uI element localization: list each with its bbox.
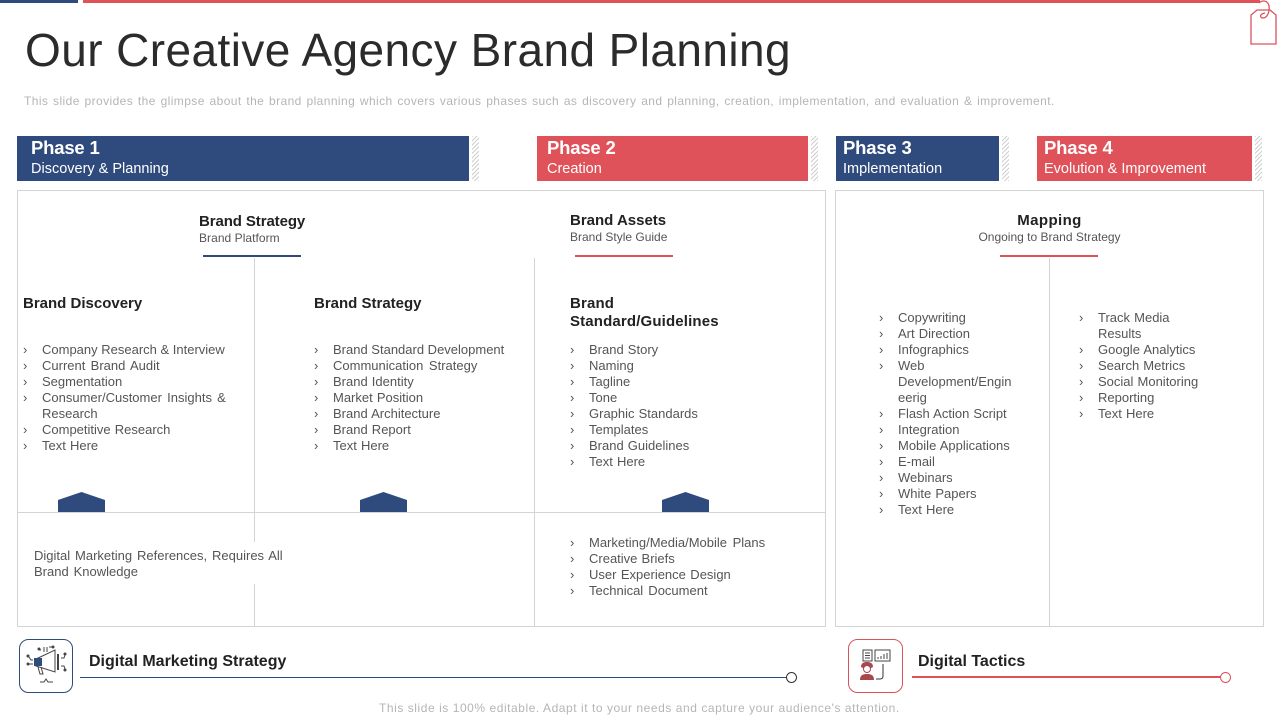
list: brand standard: Tone: [589, 390, 617, 405]
footer note: This slide is 100% editable. Adapt it to your needs and capture your audience's attention.: [379, 701, 900, 715]
list: brand discovery: Research: [42, 406, 98, 421]
list: implementation: Copywriting: [898, 310, 966, 325]
list: brand strategy: Brand Identity: [333, 374, 414, 389]
list: implementation: Flash Action Script: [898, 406, 1007, 421]
panel: implementation and evolution: [835, 190, 1264, 627]
list: brand discovery: Consumer/Customer Insights &: [42, 390, 226, 405]
list: marketing plans: Creative Briefs: [589, 551, 675, 566]
list: brand discovery: Current Brand Audit: [42, 358, 160, 373]
list: brand strategy: Text Here: [333, 438, 389, 453]
phase 4 header: Phase 4: [1044, 137, 1113, 158]
heading: brand discovery: Brand Discovery: [23, 295, 142, 312]
list: brand standard: Text Here: [589, 454, 645, 469]
heading: brand assets: [570, 212, 667, 244]
list: implementation: E-mail: [898, 454, 935, 469]
connector: digital marketing: [80, 672, 797, 683]
heading: brand strategy platform: Brand Strategy: [199, 213, 305, 230]
phase 2 header: Creation: [547, 161, 602, 177]
list: brand strategy: Brand Architecture: [333, 406, 440, 421]
list: brand discovery: [24, 342, 226, 453]
text block: digital marketing references: Digital Marketing References, Requires All: [34, 548, 283, 563]
list: marketing plans: User Experience Design: [589, 567, 731, 582]
list: brand strategy: Brand Standard Development: [333, 342, 504, 357]
heading: brand assets: Brand Assets: [570, 212, 666, 229]
list: marketing plans: Marketing/Media/Mobile Plans: [589, 535, 765, 550]
list: brand standard: Tagline: [589, 374, 630, 389]
list: brand discovery: Text Here: [42, 438, 98, 453]
list: brand standard: Templates: [589, 422, 648, 437]
list: implementation: Integration: [898, 422, 959, 437]
heading: brand standard guidelines: Standard/Guidelines: [570, 313, 719, 330]
list: brand strategy: Brand Report: [333, 422, 411, 437]
list: implementation: [880, 310, 1011, 517]
top accent bar: [0, 0, 1260, 3]
list: implementation: White Papers: [898, 486, 977, 501]
list: brand discovery: Competitive Research: [42, 422, 170, 437]
phase 1 header: [17, 136, 469, 181]
list: evaluation: Text Here: [1098, 406, 1154, 421]
heading: brand standard guidelines: [570, 295, 719, 330]
list: brand strategy: Market Position: [333, 390, 423, 405]
heading: mapping: Mapping: [1017, 212, 1082, 229]
list: brand discovery: Company Research & Interview: [42, 342, 225, 357]
list: implementation: Webinars: [898, 470, 953, 485]
marker: column 3: [662, 492, 709, 512]
phase 1 header: Discovery & Planning: [31, 161, 169, 177]
text block: digital marketing references: Brand Knowledge: [34, 564, 138, 579]
list: brand strategy: Communication Strategy: [333, 358, 477, 373]
heading: brand standard guidelines: Brand: [570, 295, 614, 312]
list: implementation: eerig: [898, 390, 927, 405]
phase 3 header: Phase 3: [843, 137, 912, 158]
list: brand standard: [570, 342, 698, 469]
list: evaluation: Track Media: [1098, 310, 1170, 325]
subtitle: This slide provides the glimpse about the brand planning which covers various phases such as discovery and planning, creation, implementation, and evaluation & improvement.: [24, 94, 1055, 108]
list: marketing plans: Technical Document: [589, 583, 708, 598]
list: implementation: Web: [898, 358, 924, 373]
list: evaluation: Search Metrics: [1098, 358, 1185, 373]
list: implementation: Text Here: [898, 502, 954, 517]
heading: mapping: Ongoing to Brand Strategy: [978, 230, 1121, 244]
list: evaluation: [1080, 310, 1198, 421]
icon: price tag: [1250, 0, 1277, 45]
heading: digital marketing strategy: Digital Marketing Strategy: [89, 653, 286, 670]
heading: brand strategy platform: [199, 213, 306, 245]
list: brand discovery: Segmentation: [42, 374, 122, 389]
list: implementation: Art Direction: [898, 326, 970, 341]
list: marketing plans: [570, 535, 765, 598]
heading: brand strategy: Brand Strategy: [314, 295, 422, 312]
list: evaluation: Reporting: [1098, 390, 1154, 405]
phase 3 header: Implementation: [843, 161, 942, 177]
list: implementation: Mobile Applications: [898, 438, 1010, 453]
list: brand strategy: [314, 342, 504, 453]
icon: megaphone: [19, 639, 73, 693]
phase 2 header: [537, 136, 808, 181]
list: brand standard: Graphic Standards: [589, 406, 698, 421]
title: Our Creative Agency Brand Planning: [25, 24, 791, 76]
connector: digital tactics: [912, 672, 1231, 683]
list: evaluation: Results: [1098, 326, 1141, 341]
icon: digital tactics: [848, 639, 903, 693]
marker: column 1: [58, 492, 105, 512]
phase 1 header: Phase 1: [31, 137, 100, 158]
phase 4 header: Evolution & Improvement: [1044, 161, 1206, 177]
list: evaluation: Social Monitoring: [1098, 374, 1198, 389]
marker: column 2: [360, 492, 407, 512]
list: evaluation: Google Analytics: [1098, 342, 1195, 357]
heading: mapping: [978, 212, 1121, 244]
phase 3 header: [836, 136, 999, 181]
list: implementation: Infographics: [898, 342, 969, 357]
heading: brand assets: Brand Style Guide: [570, 230, 667, 244]
heading: digital tactics: Digital Tactics: [918, 653, 1025, 670]
list: implementation: Development/Engin: [898, 374, 1011, 389]
list: brand standard: Naming: [589, 358, 634, 373]
list: brand standard: Brand Guidelines: [589, 438, 689, 453]
heading: brand strategy platform: Brand Platform: [199, 231, 280, 245]
phase 4 header: [1037, 136, 1252, 181]
text block: digital marketing references: [34, 548, 283, 579]
phase 2 header: Phase 2: [547, 137, 616, 158]
panel: discovery and creation: [17, 190, 826, 627]
list: brand standard: Brand Story: [589, 342, 658, 357]
